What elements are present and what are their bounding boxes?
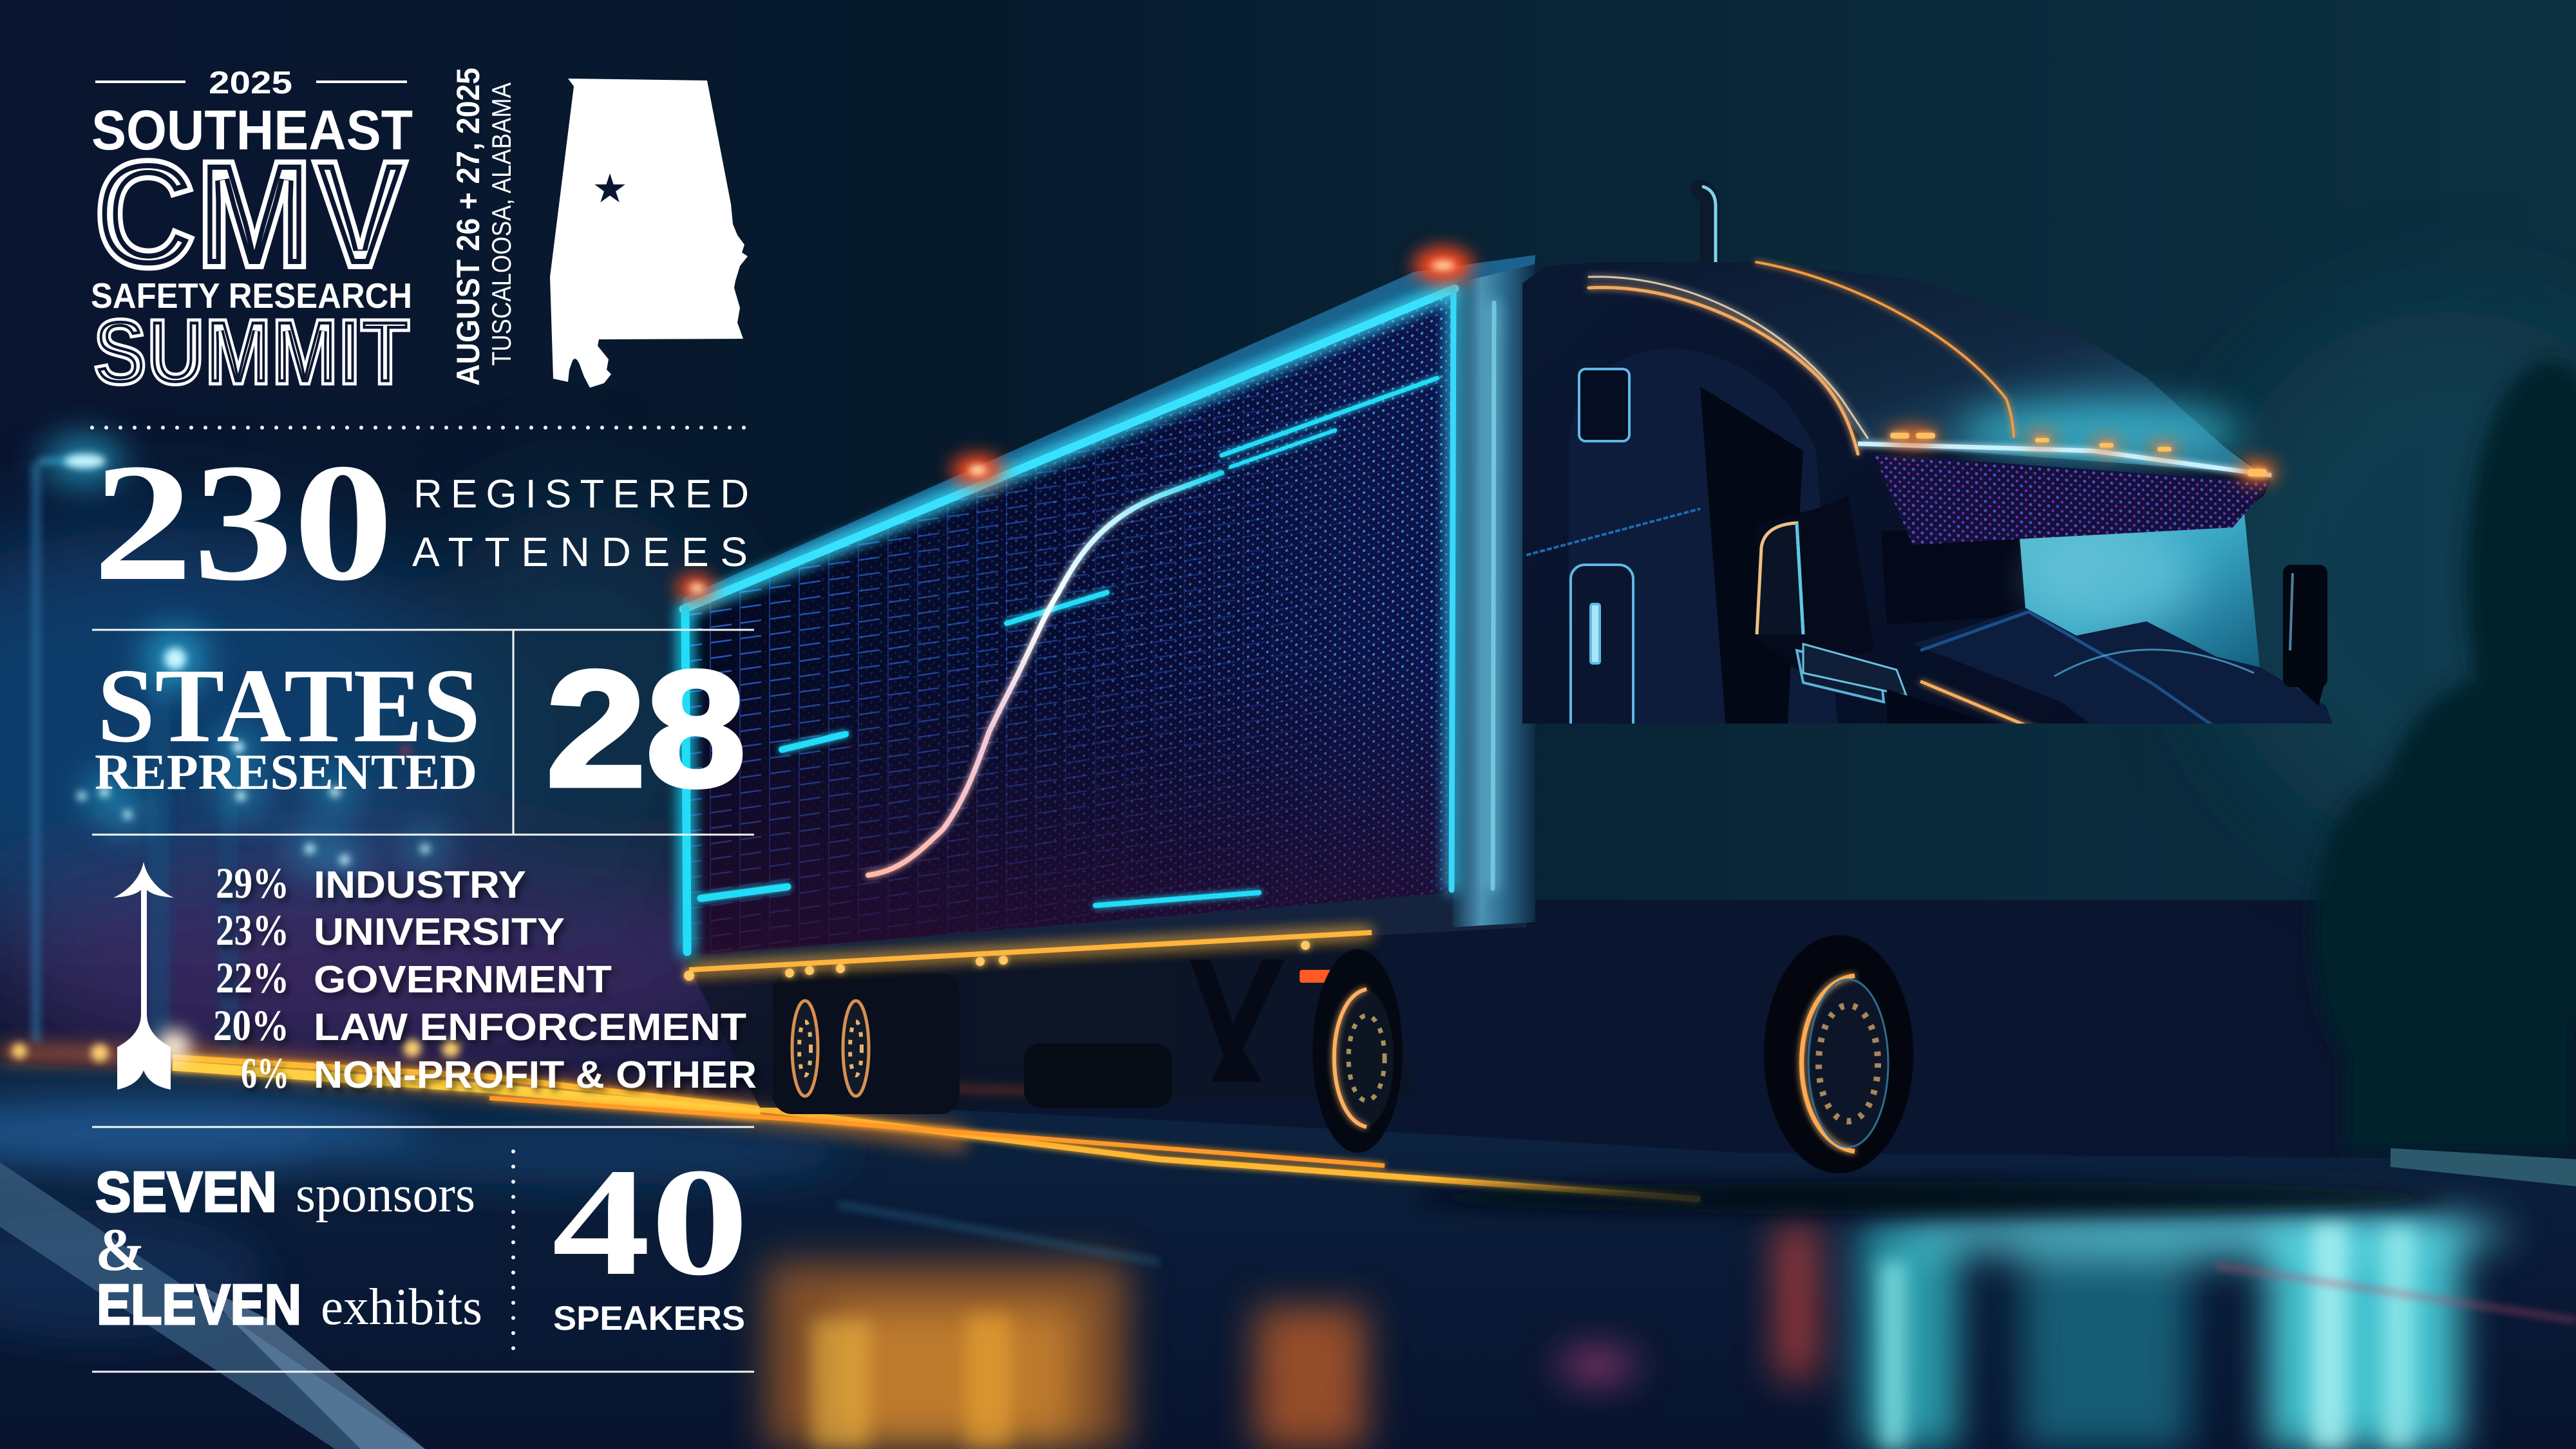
sector names: INDUSTRY [314, 864, 526, 906]
grille [2125, 761, 2333, 1083]
sector percentages: 29% [216, 858, 289, 907]
label STATES: STATES [97, 647, 480, 764]
lower rules [92, 1127, 754, 1372]
ELEVEN exhibits: ELEVEN [97, 1273, 301, 1336]
year with flanking rules [95, 66, 407, 100]
orange roof trim arcs [1589, 262, 2014, 454]
sector names [314, 864, 757, 1096]
neon edges [683, 289, 1494, 952]
side panel of sleeper [1569, 348, 1852, 922]
CMV inline lettering: CMV [94, 129, 407, 299]
trailer undercarriage [685, 927, 1417, 1114]
ELEVEN exhibits: exhibits [321, 1279, 482, 1336]
truck: tractor cab [1312, 187, 2447, 1215]
CMV inline lettering: CMV [94, 129, 407, 299]
truck: trailer [676, 247, 1535, 1114]
trailer roof edge [683, 255, 1535, 608]
left lane edge stripe [0, 1162, 425, 1449]
SEVEN sponsors [95, 1160, 475, 1224]
wheel arch light line [1768, 848, 2076, 999]
street light poles [32, 459, 238, 1056]
trailer bottom rail [687, 886, 1526, 972]
fuel tank and fairing [1479, 940, 1765, 1108]
SEVEN sponsors: sponsors [296, 1166, 475, 1223]
sector names: LAW ENFORCEMENT [314, 1006, 746, 1048]
cab silhouette [1405, 262, 2428, 1187]
icon: Alabama map with star [550, 79, 748, 388]
fog lights [2003, 1097, 2423, 1166]
sector percentages [213, 858, 289, 1097]
attendee sector breakdown [113, 858, 757, 1097]
sector percentages: 23% [216, 905, 289, 954]
orange marker line under trailer [684, 933, 1372, 983]
sector names: UNIVERSITY [314, 911, 565, 953]
dotted divider [92, 426, 749, 430]
label REGISTERED: REGISTERED [413, 472, 749, 516]
light streaks on road [0, 1030, 1700, 1199]
front post of trailer [1452, 264, 1535, 927]
year with flanking rules: 2025 [209, 66, 292, 100]
SAFETY RESEARCH: SAFETY RESEARCH [91, 276, 412, 316]
event date: AUGUST 26 + 27, 2025 [450, 68, 486, 386]
sector names: GOVERNMENT [314, 958, 612, 1001]
trees at the right edge [2312, 361, 2576, 1153]
sleeper panels and windows [1569, 369, 1633, 898]
exhaust stack [1700, 187, 1716, 274]
lower cab body [1887, 689, 2125, 1005]
ELEVEN exhibits [97, 1273, 482, 1336]
road surface [0, 1063, 2576, 1449]
stat rules [92, 630, 754, 835]
label REPRESENTED: REPRESENTED [95, 744, 477, 800]
event logo: 2025 Southeast CMV Safety Research Summit [91, 66, 748, 404]
CMV inline lettering: CMV [94, 129, 407, 299]
amber roof lights [1887, 428, 2277, 482]
front wheel [1764, 935, 1913, 1173]
sector names: NON-PROFIT & OTHER [314, 1054, 757, 1096]
ampersand: & [95, 1217, 146, 1283]
stat: 230 registered attendees [93, 429, 749, 616]
left side mirror arm [1803, 644, 1906, 696]
stat: states represented [95, 637, 746, 821]
S-curve on trailer [868, 473, 1222, 875]
trailer side panel with LED dots [683, 289, 1455, 956]
roof fairing [1571, 262, 2260, 473]
red clearance lights [676, 247, 1473, 601]
icon: vertical arrow [113, 862, 174, 1090]
wet road reflections [766, 1208, 2512, 1449]
sector percentages: 22% [216, 953, 289, 1002]
icon: Alabama map with star: ★ [592, 165, 628, 212]
hood [1913, 608, 2345, 761]
SEVEN sponsors: SEVEN [95, 1160, 277, 1224]
neon graph dashes [701, 378, 1437, 905]
SUMMIT inline lettering: SUMMIT [93, 300, 410, 404]
SUMMIT inline lettering: SUMMIT [93, 300, 410, 404]
front bumper trims [1920, 1016, 2423, 1093]
street lights [45, 441, 439, 874]
label ATTENDEES: ATTENDEES [412, 529, 748, 575]
number 28: 28 [546, 637, 746, 821]
windshield [1881, 513, 2260, 667]
sector percentages: 6% [241, 1048, 289, 1097]
headlights [1944, 918, 2412, 1008]
SUMMIT inline lettering: SUMMIT [93, 300, 410, 404]
sector percentages: 20% [213, 1001, 289, 1050]
SOUTHEAST: SOUTHEAST [91, 99, 413, 162]
curb at right [2391, 1148, 2576, 1186]
vertical dotted divider [511, 1151, 515, 1350]
side window [1756, 496, 1884, 702]
right side mirror [2283, 565, 2327, 706]
emblem [2216, 726, 2244, 779]
trailer rear wheels [792, 1001, 869, 1096]
drive wheel [1312, 949, 1403, 1153]
event location: TUSCALOOSA, ALABAMA [486, 82, 516, 366]
sun visor with dots [1858, 444, 2271, 545]
number 230: 230 [93, 429, 393, 616]
stat: 40 speakers [552, 1136, 749, 1338]
sponsors and exhibits [95, 1160, 482, 1336]
underbody shadow on road [1417, 1181, 2447, 1215]
number 40: 40 [552, 1136, 749, 1307]
label SPEAKERS: SPEAKERS [553, 1300, 745, 1338]
grille surround [2114, 741, 2351, 1095]
